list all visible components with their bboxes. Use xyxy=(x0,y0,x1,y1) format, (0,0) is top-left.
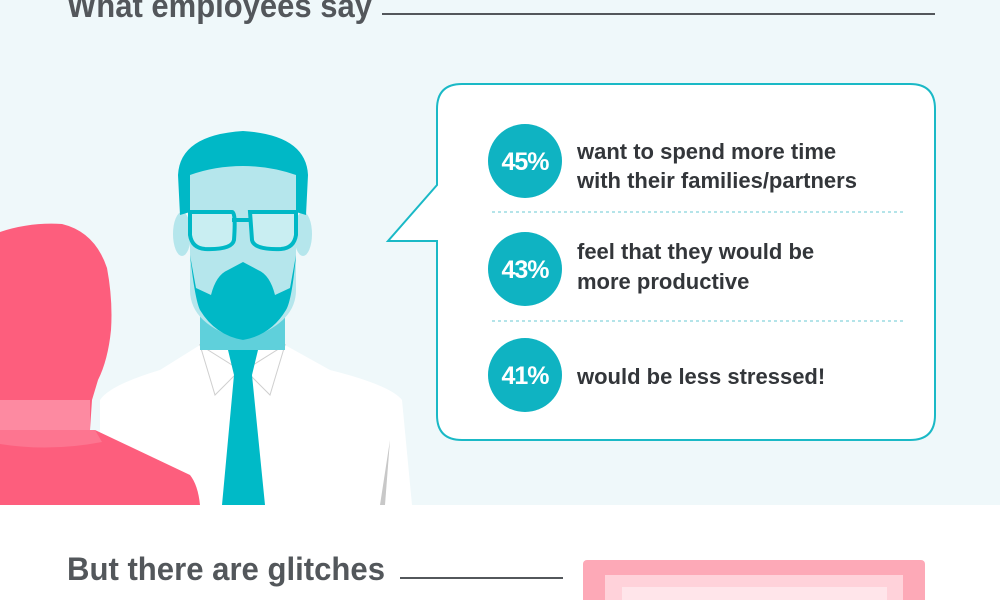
illustration: pink person silhouette xyxy=(0,224,200,505)
icon: pink monitor xyxy=(583,560,925,600)
stat 45%: 45% xyxy=(501,148,549,176)
stat 45% xyxy=(488,124,857,198)
stat 43%: 43% xyxy=(501,256,549,284)
heading: But there are glitches: But there are glitches xyxy=(67,551,385,587)
stat 45%: with their families/partners xyxy=(576,168,857,193)
stat 43% xyxy=(488,232,814,306)
stat 43%: feel that they would be xyxy=(577,239,814,264)
stat 41% xyxy=(488,338,825,412)
stat 45%: want to spend more time xyxy=(576,139,836,164)
stat 41%: 41% xyxy=(501,362,549,390)
stat 43%: more productive xyxy=(577,269,749,294)
illustration: man with glasses and tie xyxy=(100,131,412,505)
speech bubble xyxy=(388,84,935,440)
stat 41%: would be less stressed! xyxy=(576,364,825,389)
